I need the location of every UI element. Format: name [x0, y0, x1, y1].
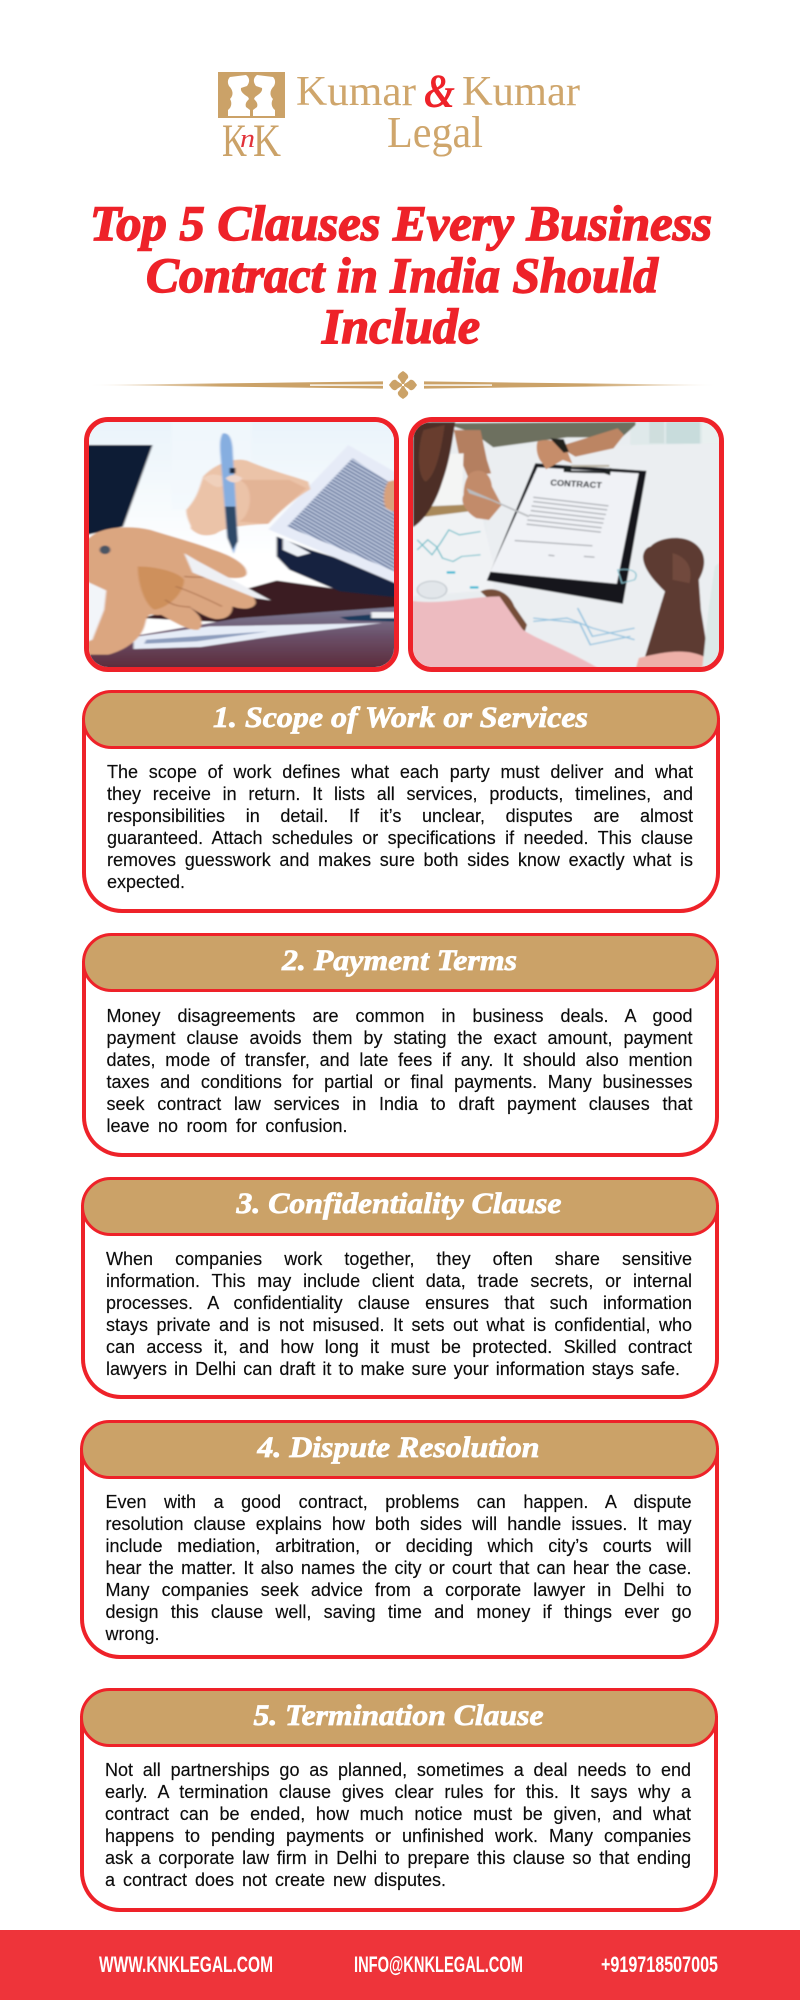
text: clause 2: Money disagreements are common in business deals. A good — [106, 1006, 692, 1026]
heading: clause 4: 4. Dispute Resolution — [256, 1431, 539, 1464]
footer: contact bar — [0, 1930, 800, 2000]
photo: contract on clipboard: CONTRACT — [550, 478, 602, 491]
heading: clause 1: 1. Scope of Work or Services — [213, 701, 588, 734]
text: clause 5: early. A termination clause gives clear rules for this. It says why a — [105, 1782, 691, 1802]
text: clause 4: wrong. — [106, 1624, 160, 1644]
text: clause 1: they receive in return. It lists all services, products, timelines, and — [107, 784, 693, 804]
text: clause 4 — [105, 1492, 692, 1644]
heading: clause 3 — [80, 1177, 719, 1236]
text: clause 3: stays private and is not misused. It sets out what is confidential, who — [106, 1315, 692, 1335]
panel: clause 4 — [80, 1420, 719, 1659]
text: clause 4: hear the matter. It also names the city or court that can hear the case. — [106, 1558, 692, 1578]
text: clause 1: responsibilities in detail. If it’s unclear, disputes are almost — [107, 806, 693, 826]
heading: clause 2: 2. Payment Terms — [281, 944, 517, 977]
icon: KnK monogram — [222, 115, 281, 167]
panel: clause 1 — [82, 690, 720, 913]
logo wordmark: & — [424, 65, 455, 118]
logo: Kumar & Kumar Legal — [218, 65, 580, 167]
text: clause 5: contract can be ended, how much notice must be given, and what — [105, 1804, 691, 1824]
photo: hands exchanging document — [84, 417, 399, 672]
text: clause 3: When companies work together, they often share sensitive — [106, 1249, 692, 1269]
photo: contract on clipboard — [408, 417, 724, 672]
text: clause 2: seek contract law services in India to draft payment clauses that — [106, 1094, 692, 1114]
divider ornament — [105, 371, 700, 399]
logo wordmark: Legal — [387, 108, 483, 157]
footer website: WWW.KNKLEGAL.COM — [99, 1952, 273, 1977]
heading: clause 5: 5. Termination Clause — [253, 1699, 543, 1732]
text: clause 3 — [106, 1249, 692, 1380]
footer phone: +919718507005 — [601, 1952, 718, 1977]
panel: clause 3 — [81, 1177, 719, 1399]
text: clause 5: happens to pending payments or unfinished work. Many companies — [105, 1826, 691, 1846]
title: Top 5 Clauses Every Business — [90, 195, 712, 251]
heading: clause 1 — [82, 690, 720, 749]
text: clause 5: Not all partnerships go as planned, sometimes a deal needs to end — [105, 1760, 691, 1780]
text: clause 2: dates, mode of transfer, and late fees if any. It should also mention — [106, 1050, 692, 1070]
text: clause 4: Many companies seek advice from a corporate lawyer in Delhi to — [106, 1580, 692, 1600]
icon: gold square with chess knights — [218, 72, 285, 118]
text: clause 4: design this clause well, saving time and money if things ever go — [106, 1602, 692, 1622]
icon: cross ornament — [389, 371, 417, 399]
text: clause 2: leave no room for confusion. — [106, 1116, 348, 1136]
text: clause 1 — [107, 762, 693, 892]
text: clause 5 — [105, 1760, 692, 1890]
logo wordmark: Kumar — [296, 69, 416, 115]
text: clause 3: lawyers in Delhi can draft it to make sure your information stays safe. — [106, 1359, 680, 1379]
icon: KnK monogram: n — [240, 124, 255, 153]
panel: clause 5 — [80, 1688, 718, 1912]
text: clause 3: can access it, and how long it must be protected. Skilled contract — [106, 1337, 692, 1357]
panel: clause 2 — [82, 933, 719, 1157]
text: clause 2 — [106, 1006, 692, 1136]
text: clause 1: The scope of work defines what each party must deliver and what — [107, 762, 693, 782]
text: clause 4: resolution clause explains how both sides will handle issues. It may — [106, 1514, 692, 1534]
text: clause 3: processes. A confidentiality clause ensures that such information — [106, 1293, 692, 1313]
text: clause 4: include mediation, arbitration, or deciding which city’s courts will — [106, 1536, 692, 1556]
text: clause 5: a contract does not create new disputes. — [105, 1870, 446, 1890]
heading: clause 3: 3. Confidentiality Clause — [235, 1187, 561, 1220]
text: clause 1: expected. — [107, 872, 185, 892]
text: clause 1: removes guesswork and makes sure both sides know exactly what is — [107, 850, 693, 870]
heading: clause 4 — [80, 1420, 718, 1479]
title — [90, 195, 712, 354]
text: clause 1: guaranteed. Attach schedules or specifications if needed. This clause — [107, 828, 693, 848]
footer email: INFO@KNKLEGAL.COM — [354, 1952, 523, 1977]
text: clause 5: ask a corporate law firm in Delhi to prepare this clause so that ending — [105, 1848, 691, 1868]
title: Contract in India Should — [146, 247, 659, 303]
logo wordmark: Kumar — [462, 69, 580, 115]
heading: clause 2 — [82, 933, 719, 992]
text: clause 4: Even with a good contract, problems can happen. A dispute — [106, 1492, 692, 1512]
icon: KnK monogram: K — [253, 115, 281, 167]
text: clause 2: payment clause avoids them by stating the exact amount, payment — [106, 1028, 692, 1048]
heading: clause 5 — [80, 1688, 718, 1747]
text: clause 2: taxes and conditions for partial or final payments. Many businesses — [106, 1072, 692, 1092]
title: Include — [321, 298, 480, 354]
text: clause 3: information. This may include client data, trade secrets, or internal — [106, 1271, 692, 1291]
logo wordmark — [296, 65, 580, 157]
icon: KnK monogram: K — [222, 115, 247, 167]
